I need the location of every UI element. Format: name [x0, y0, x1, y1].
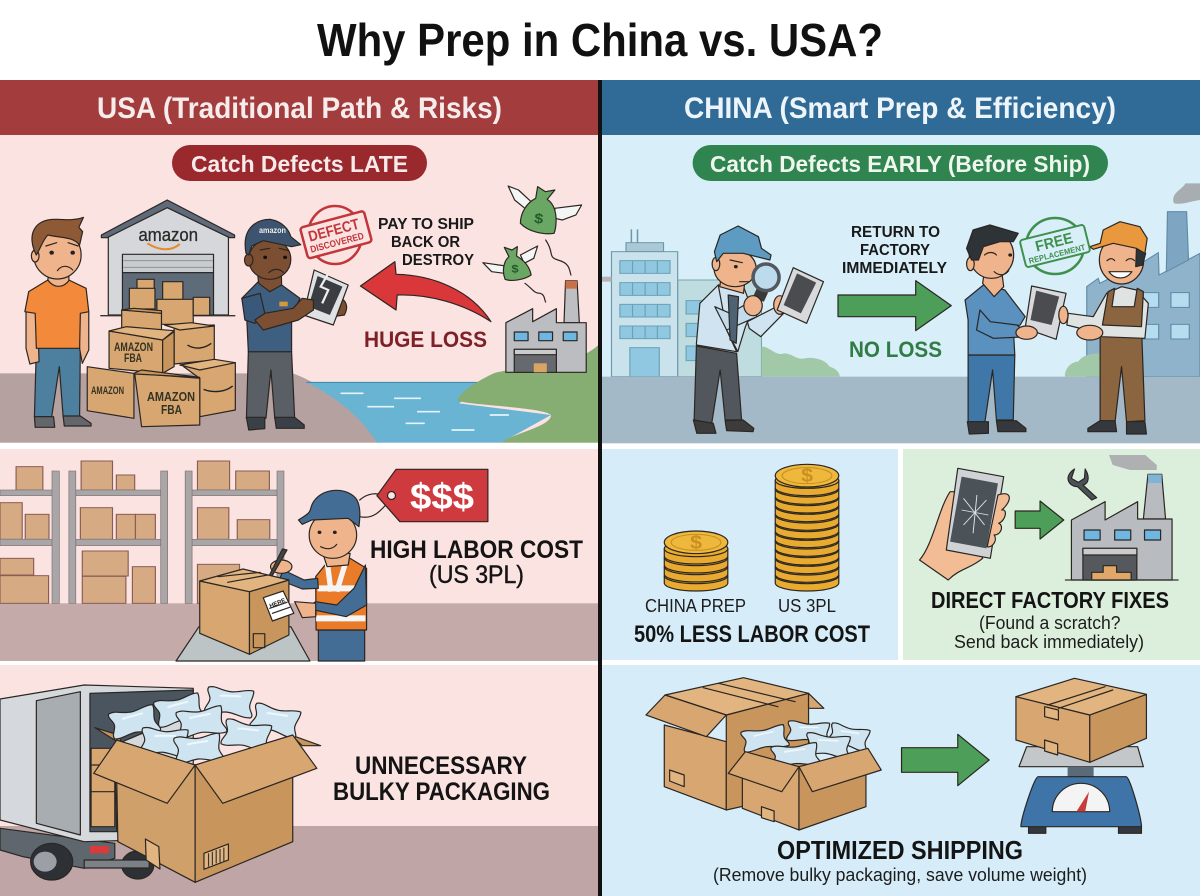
icon: sad seller — [25, 217, 91, 427]
icon: wrench — [1068, 469, 1097, 500]
tag: $$$ price tag: $$$ — [410, 476, 474, 517]
stamp: defect discovered: DEFECT — [307, 216, 361, 246]
panel: China optimized shipping — [602, 665, 1200, 896]
text: pay to ship back or destroy: DESTROY — [402, 252, 474, 269]
icon: packer with box: HERE — [269, 598, 287, 610]
title: Why Prep in China vs. USA? — [317, 14, 883, 66]
background buildings and ground — [600, 183, 1200, 443]
text: direct factory fixes: Send back immediately) — [954, 632, 1144, 652]
text: direct factory fixes: (Found a scratch? — [979, 613, 1120, 633]
chart: coin stacks — [664, 464, 839, 591]
text: optimized shipping — [713, 835, 1087, 885]
text: optimized shipping: OPTIMIZED SHIPPING — [777, 835, 1023, 865]
panel: China 50% less labor cost — [602, 449, 898, 660]
boxes: Amazon FBA stack: AMAZON — [114, 340, 153, 354]
text: pay to ship back or destroy: PAY TO SHIP — [378, 216, 474, 233]
chart: coin stacks: $ — [690, 533, 702, 553]
arrow: green forward arrow — [838, 281, 951, 331]
panel: USA column header — [0, 80, 598, 135]
text: return to factory immediately: IMMEDIATELY — [842, 260, 947, 277]
arrow: red return arrow — [360, 262, 491, 322]
icon: inspector with magnifier and tablet — [693, 226, 823, 433]
icon: Amazon worker with cracked tablet: amazon — [259, 226, 286, 235]
chart: coin stacks: $ — [801, 466, 813, 486]
pill: catch defects late: Catch Defects LATE — [191, 151, 408, 177]
tag: $$$ price tag — [360, 469, 488, 522]
stamp: free replacement: REPLACEMENT — [1028, 243, 1086, 266]
text: China prep label: CHINA PREP — [645, 596, 746, 616]
icon: Amazon warehouse: amazon — [138, 225, 198, 245]
panel: USA catch defects late — [0, 135, 600, 443]
text: pay to ship back or destroy — [378, 216, 474, 269]
text: unnecessary bulky packaging: UNNECESSARY — [355, 752, 527, 780]
text: 50% less labor cost: 50% LESS LABOR COST — [634, 621, 870, 648]
icon: delivery truck — [0, 685, 193, 880]
text: return to factory immediately: RETURN TO — [851, 224, 940, 241]
icon: flying money bags — [483, 186, 582, 302]
text: high labor cost — [370, 536, 583, 589]
ground, water and hill — [0, 343, 600, 443]
boxes: Amazon FBA stack: FBA — [161, 402, 182, 417]
text: return to factory immediately — [842, 224, 947, 277]
stamp: free replacement: FREE — [1034, 230, 1075, 255]
warehouse shelves and floor — [0, 461, 598, 661]
panel: USA unnecessary bulky packaging — [0, 665, 598, 896]
pill: catch defects late — [172, 145, 427, 181]
icon: manager receiving tablet — [965, 225, 1066, 434]
panel: China column header — [602, 80, 1200, 135]
text: US 3PL label: US 3PL — [778, 596, 836, 616]
arrow: large green arrow — [902, 734, 989, 786]
boxes: Amazon FBA stack: FBA — [124, 351, 142, 365]
icon: large and small boxes with pillows — [646, 678, 881, 830]
panel: China column header: CHINA (Smart Prep & Efficiency) — [684, 92, 1116, 125]
pill: catch defects early — [693, 145, 1108, 181]
text: pay to ship back or destroy: BACK OR — [391, 234, 460, 251]
icon: Amazon warehouse — [100, 200, 235, 324]
panel: China catch defects early — [600, 135, 1200, 443]
icon: factory with boxes — [1065, 455, 1179, 580]
panel: USA column header: USA (Traditional Path & Risks) — [97, 92, 502, 125]
icon: flying money bags: $ — [511, 262, 519, 275]
boxes: Amazon FBA stack — [87, 308, 235, 427]
text: direct factory fixes: DIRECT FACTORY FIXES — [931, 587, 1169, 613]
text: return to factory immediately: FACTORY — [860, 242, 930, 259]
text: optimized shipping: (Remove bulky packaging, save volume weight) — [713, 865, 1087, 885]
panel: China direct factory fixes — [903, 449, 1200, 660]
panel: USA high labor cost — [0, 449, 598, 661]
icon: factory worker — [1059, 222, 1148, 434]
icon: oversized box with air pillows — [94, 685, 321, 882]
icon: Amazon worker with cracked tablet — [242, 219, 348, 430]
icon: packer with box — [176, 490, 367, 661]
arrow: small green arrow — [1015, 501, 1064, 539]
icon: weighing scale with small box — [1016, 678, 1146, 833]
text: unnecessary bulky packaging — [333, 752, 550, 806]
stamp: defect discovered: DISCOVERED — [309, 231, 365, 256]
boxes: Amazon FBA stack: AMAZON — [91, 385, 124, 397]
pill: catch defects early: Catch Defects EARLY (Before Ship) — [710, 151, 1090, 177]
boxes: Amazon FBA stack: AMAZON — [147, 389, 195, 404]
text: no loss: NO LOSS — [849, 337, 942, 362]
text: high labor cost: (US 3PL) — [429, 561, 524, 589]
text: unnecessary bulky packaging: BULKY PACKAGING — [333, 778, 550, 806]
text: direct factory fixes — [931, 587, 1169, 652]
center divider — [598, 80, 602, 896]
text: high labor cost: HIGH LABOR COST — [370, 536, 583, 564]
icon: distant factory — [506, 281, 586, 372]
icon: flying money bags: $ — [533, 211, 545, 227]
stamp: defect discovered — [300, 206, 372, 264]
stamp: free replacement — [1020, 218, 1090, 274]
icon: hand holding cracked phone — [920, 468, 1009, 580]
text: huge loss: HUGE LOSS — [364, 327, 487, 352]
